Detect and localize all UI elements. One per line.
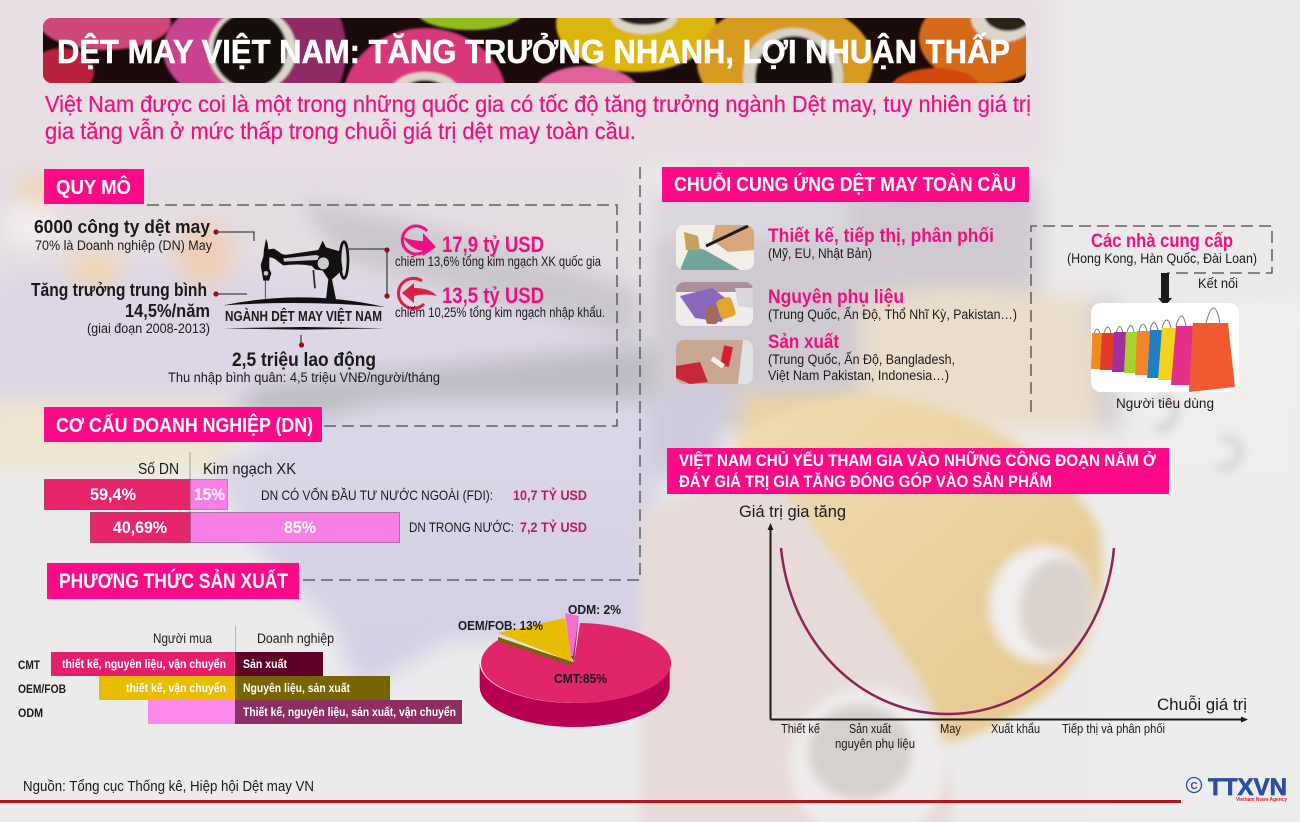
intro text: gia tăng vẫn ở mức thấp trong chuỗi giá trị dệt may toàn cầu.: [45, 118, 636, 144]
chart: 3D pie of production modes: CMT:85%: [554, 671, 607, 686]
chart: production modes table: Người mua: [153, 631, 212, 646]
chart: production modes table: ODM: [18, 706, 43, 720]
stat: average growth: 14,5%/năm: [125, 301, 210, 321]
heading: Vietnam in value chain: ĐÁY GIÁ TRỊ GIA TĂNG ĐÓNG GÓP VÀO SẢN PHẨM: [679, 472, 1052, 491]
chart: enterprise structure bars: Số DN: [138, 461, 179, 478]
stat: workforce: 2,5 triệu lao động: [232, 350, 376, 371]
supply item: manufacturing: (Trung Quốc, Ấn Độ, Bangladesh,: [768, 352, 955, 367]
chart: smile curve of value added: [739, 503, 1248, 751]
logo: TTXVN: TTXVN: [1208, 774, 1287, 801]
supply item: design: (Mỹ, EU, Nhật Bản): [768, 246, 872, 261]
supply item: materials: [676, 282, 1017, 326]
stat: 6000 companies: 6000 công ty dệt may: [34, 217, 210, 237]
title banner: [43, 18, 1026, 83]
heading: Vietnam in value chain: VIỆT NAM CHỦ YẾU THAM GIA VÀO NHỮNG CÔNG ĐOẠN NẰM Ở: [679, 450, 1157, 470]
supply item: manufacturing: Việt Nam Pakistan, Indonesia…): [768, 368, 949, 383]
intro text: Việt Nam được coi là một trong những quốc gia có tốc độ tăng trưởng ngành Dệt may, tuy nhiên giá trị: [45, 91, 1031, 117]
heading: Quy mô: QUY MÔ: [56, 175, 131, 199]
icon: import arrow: [398, 278, 437, 308]
stat: export value: 17,9 tỷ USD: [442, 232, 544, 257]
chart: enterprise structure bars: 40,69%: [113, 519, 167, 537]
stat: import value: chiếm 10,25% tổng kim ngạch nhập khẩu.: [395, 305, 605, 320]
stat: import value: 13,5 tỷ USD: [442, 283, 544, 308]
suppliers text: [1067, 231, 1257, 266]
chart: smile curve of value added: Thiết kế: [781, 722, 820, 736]
supply item: manufacturing: [676, 332, 955, 384]
consumers caption: Người tiêu dùng: [1116, 396, 1214, 411]
chart: production modes table: thiết kế, vận chuyển: [126, 681, 226, 695]
chart: enterprise structure bars: [44, 452, 587, 542]
thumbnail: fabric and thread: [676, 282, 753, 326]
source note: Nguồn: Tổng cục Thống kê, Hiệp hội Dệt may VN: [23, 778, 314, 795]
stat: import value: [395, 283, 605, 320]
stat: export value: chiếm 13,6% tổng kim ngạch XK quốc gia: [395, 254, 601, 269]
heading: Chuỗi cung ứng: [662, 167, 1029, 202]
chart: 3D pie of production modes: ODM: 2%: [568, 602, 621, 617]
heading: Cơ cấu doanh nghiệp: [44, 407, 322, 442]
banner photo: coloured thread spools: [43, 18, 1026, 83]
chart: smile curve of value added: nguyên phụ liệu: [835, 737, 915, 751]
stat: average growth: Tăng trưởng trung bình: [31, 280, 207, 300]
thumbnail: sewing tools: [676, 340, 753, 384]
title text: DỆT MAY VIỆT NAM: TĂNG TRƯỞNG NHANH, LỢI NHUẬN THẤP: [57, 33, 1010, 70]
supply item: design: Thiết kế, tiếp thị, phân phối: [768, 226, 994, 247]
stat: 6000 companies: 70% là Doanh nghiệp (DN) May: [35, 238, 212, 253]
arrow: suppliers connect to consumers: Kết nối: [1198, 276, 1238, 291]
suppliers text: Các nhà cung cấp: [1091, 231, 1233, 252]
chart: enterprise structure bars: Kim ngạch XK: [203, 461, 296, 478]
supply item: design: [676, 222, 994, 270]
icon: sewing machine with label: [223, 239, 385, 330]
stat: workforce: [168, 335, 440, 385]
icon: export arrow: [402, 226, 436, 256]
heading: Phương thức sản xuất: PHƯƠNG THỨC SẢN XUẤT: [59, 569, 288, 593]
chart: production modes table: CMT: [18, 658, 41, 672]
chart: enterprise structure bars: DN TRONG NƯỚC:: [409, 519, 514, 535]
chart: production modes table: OEM/FOB: [18, 682, 66, 696]
heading: Cơ cấu doanh nghiệp: CƠ CẤU DOANH NGHIỆP (DN): [56, 413, 313, 437]
stat: export value: [395, 232, 601, 269]
chart: smile curve of value added: Xuất khẩu: [991, 722, 1040, 736]
chart: enterprise structure bars: 15%: [194, 486, 225, 504]
chart: enterprise structure bars: 59,4%: [90, 486, 136, 504]
arrow: suppliers connect to consumers: [1158, 273, 1238, 306]
chart: production modes table: Doanh nghiệp: [257, 631, 334, 646]
stat: average growth: (giai đoạn 2008-2013): [87, 321, 210, 336]
chart: enterprise structure bars: 7,2 TỶ USD: [520, 519, 587, 535]
chart: enterprise structure bars: 10,7 TỶ USD: [513, 487, 587, 503]
thumbnail: fashion design sketch: [676, 222, 756, 270]
chart: 3D pie of production modes: OEM/FOB: 13%: [458, 618, 543, 633]
chart: smile curve of value added: Chuỗi giá trị: [1157, 695, 1247, 714]
footer rule: [0, 800, 1181, 803]
stat: workforce: Thu nhập bình quân: 4,5 triệu VNĐ/người/tháng: [168, 370, 440, 385]
chart: enterprise structure bars: 85%: [284, 519, 316, 537]
chart: production modes table: [18, 626, 462, 724]
heading: Phương thức sản xuất: [47, 563, 299, 599]
chart: 3D pie of production modes: [458, 602, 671, 727]
logo: TTXVN: C: [1190, 781, 1198, 792]
logo: TTXVN: Vietnam News Agency: [1236, 797, 1288, 803]
chart: production modes table: Nguyên liệu, sản xuất: [243, 681, 350, 695]
chart: smile curve of value added: May: [940, 722, 962, 736]
stat: average growth: [31, 280, 247, 336]
chart: smile curve of value added: Tiếp thị và phân phối: [1062, 722, 1165, 736]
chart: smile curve of value added: Sản xuất: [849, 722, 891, 736]
chart: production modes table: Sản xuất: [243, 657, 287, 671]
chart: production modes table: thiết kế, nguyên liệu, vận chuyển: [62, 657, 226, 671]
divider frames: dashed connectors: [147, 167, 1272, 580]
suppliers text: (Hong Kong, Hàn Quốc, Đài Loan): [1067, 251, 1257, 266]
chart: smile curve of value added: Giá trị gia tăng: [739, 503, 846, 521]
intro text: [45, 91, 1031, 144]
icon: sewing machine with label: NGÀNH DỆT MAY VIỆT NAM: [225, 307, 382, 325]
supply item: manufacturing: Sản xuất: [768, 332, 840, 353]
consumers: shopping bags card: [1091, 303, 1239, 392]
heading: Chuỗi cung ứng: CHUỖI CUNG ỨNG DỆT MAY TOÀN CẦU: [674, 172, 1016, 196]
supply item: materials: Nguyên phụ liệu: [768, 287, 904, 308]
heading: Quy mô: [44, 169, 144, 204]
chart: enterprise structure bars: DN CÓ VỐN ĐẦU TƯ NƯỚC NGOÀI (FDI):: [261, 486, 493, 503]
supply item: materials: (Trung Quốc, Ấn Độ, Thổ Nhĩ Kỳ, Pakistan…): [768, 307, 1017, 322]
stat: 6000 companies: [34, 217, 254, 253]
heading: Vietnam in value chain: [667, 448, 1169, 494]
chart: production modes table: Thiết kế, nguyên liệu, sản xuất, vận chuyển: [243, 705, 456, 719]
connector to export and import: [347, 247, 390, 299]
